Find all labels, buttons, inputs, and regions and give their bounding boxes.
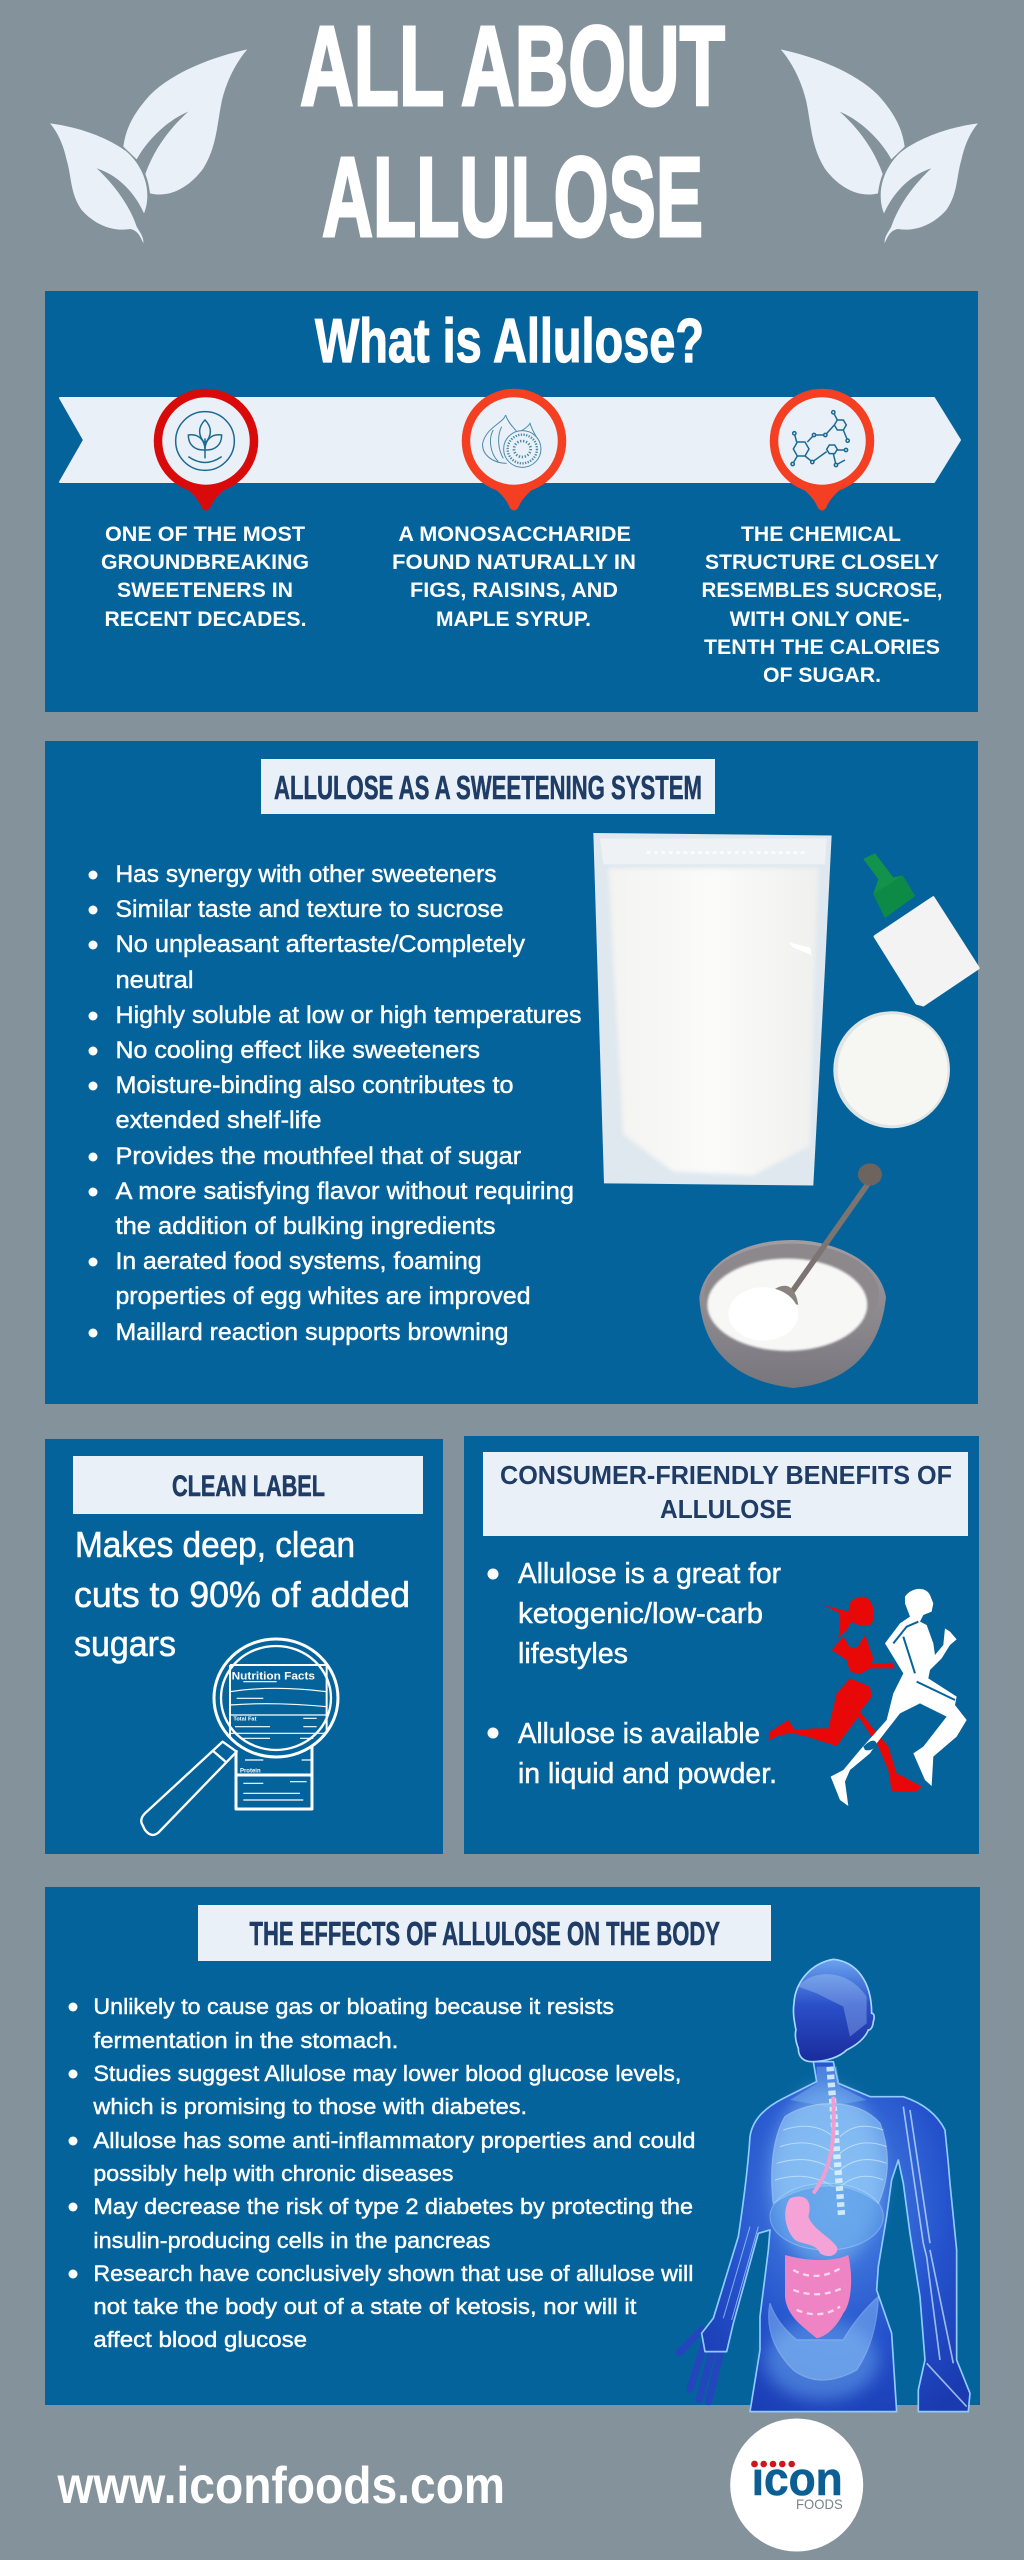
caption: groundbreaking: ONE OF THE MOST [105,523,305,546]
caption: chemical structure: WITH ONLY ONE- [730,608,910,631]
caption: chemical structure: STRUCTURE CLOSELY [705,551,939,574]
neck glow [790,2067,867,2107]
icon: magnifier over nutrition label [141,1639,338,1835]
caption: groundbreaking: GROUNDBREAKING [101,551,309,574]
heading: effects on the body: THE EFFECTS OF ALLULOSE ON THE BODY [250,1915,720,1952]
bullet list: sweetening properties: Provides the mouthfeel that of sugar [116,1143,521,1170]
bullet list: sweetening properties: Moisture-binding also contributes to [116,1072,514,1099]
skull highlight [798,1974,867,2037]
panel: consumer-friendly benefits [464,1436,979,1854]
spine [830,2067,842,2217]
bullet list: benefits: in liquid and powder. [518,1758,777,1790]
heading: consumer-friendly benefits [483,1452,968,1536]
head [793,1959,874,2062]
pin: fig icon [466,393,562,510]
ribs [775,2126,887,2187]
caption: monosaccharide: FOUND NATURALLY IN [392,551,636,574]
left hand fingers [679,2330,722,2402]
abdomen [770,2183,883,2250]
bullet list: sweetening properties: A more satisfying flavor without requiring [116,1178,574,1205]
bullet list: sweetening properties: Has synergy with other sweeteners [116,861,496,888]
image: dropper bottle [863,853,978,1005]
icon: magnifier over nutrition label: Protein [240,1769,261,1775]
bullet list: sweetening properties [88,861,582,1346]
pin: molecule icon [774,393,870,510]
bullet list: sweetening properties: No cooling effect like sweeteners [116,1037,480,1064]
rib cage [772,2104,887,2203]
body silhouette [702,2062,970,2412]
bullet list: effects: possibly help with chronic diseases [93,2161,453,2186]
bullet list: effects: Research have conclusively shown that use of allulose will [93,2261,693,2286]
bullet list: sweetening properties: extended shelf-life [116,1107,322,1134]
text: clean cuts: sugars [74,1623,176,1664]
bullet list: sweetening properties: No unpleasant aftertaste/Completely [116,931,525,958]
title: ALLULOSE [322,134,703,260]
bullet list: sweetening properties: Similar taste and texture to sucrose [116,896,503,923]
bullet list: effects: Studies suggest Allulose may lower blood glucose levels, [93,2061,681,2086]
bullet list: effects: Allulose has some anti-inflammatory properties and could [93,2128,695,2153]
caption: chemical structure: OF SUGAR. [763,664,881,687]
bullet list: sweetening properties: Highly soluble at low or high temperatures [116,1002,582,1029]
icon: leaves left [50,49,247,243]
heading: sweetening system: ALLULOSE AS A SWEETENING SYSTEM [274,769,702,806]
bullet list: effects: which is promising to those with diabetes. [92,2094,527,2119]
bullet list: benefits: Allulose is available [518,1718,760,1750]
caption: groundbreaking: SWEETENERS IN [117,579,293,602]
icon: runners [768,1589,967,1806]
icon: leaves right [781,49,978,243]
text: clean cuts: cuts to 90% of added [74,1574,410,1615]
right arm bones [903,2107,967,2407]
panel: clean label [45,1439,443,1854]
pin: plant icon [158,393,254,510]
bullet list: benefits: ketogenic/low-carb [518,1598,763,1630]
logo: icon foods [730,2418,863,2552]
bullet list: benefits: Allulose is a great for [518,1558,781,1590]
intestine highlights [793,2267,845,2314]
bullet list: sweetening properties: neutral [116,967,194,994]
text: clean cuts [74,1524,410,1664]
hip glow [765,2320,878,2400]
logo: icon foods: icon [752,2452,843,2505]
title: ALL ABOUT [300,3,725,129]
panel: effects on the body [45,1887,980,2405]
bullet list: sweetening properties: the addition of bulking ingredients [116,1213,496,1240]
stomach [785,2196,837,2256]
caption: chemical structure: RESEMBLES SUCROSE, [702,579,942,602]
bullet list: effects: affect blood glucose [93,2327,307,2352]
caption: chemical structure: THE CHEMICAL [741,523,901,546]
panel: sweetening system [45,741,978,1404]
caption: monosaccharide: A MONOSACCHARIDE [398,523,631,546]
heading: clean label: CLEAN LABEL [172,1470,325,1503]
bullet list: benefits: lifestyles [518,1638,628,1670]
heading: consumer-friendly benefits: CONSUMER-FRIENDLY BENEFITS OF [500,1460,952,1490]
caption: monosaccharide: FIGS, RAISINS, AND [410,579,618,602]
icon: magnifier over nutrition label: Nutrition Facts [232,1670,315,1682]
heading: consumer-friendly benefits: ALLULOSE [660,1494,792,1524]
caption: groundbreaking [101,523,309,631]
bullet list: effects [68,1994,695,2352]
heading: what is allulose: What is Allulose? [315,307,704,376]
bullet list: sweetening properties: In aerated food systems, foaming [116,1248,482,1275]
bullet list: effects: insulin-producing cells in the pancreas [93,2228,490,2253]
image: translucent human body [679,1959,970,2412]
intestines [785,2255,851,2338]
image: powder dish [833,1011,950,1128]
panel: what is allulose [45,291,978,712]
caption: monosaccharide [392,523,636,631]
caption: monosaccharide: MAPLE SYRUP. [436,608,591,631]
bullet list: effects: May decrease the risk of type 2 diabetes by protecting the [93,2194,693,2219]
bullet list: effects: fermentation in the stomach. [93,2028,398,2053]
icon: magnifier over nutrition label: Total Fat [233,1717,257,1723]
bullet list: sweetening properties: properties of egg whites are improved [116,1283,530,1310]
bullet list: benefits [488,1558,781,1790]
logo: icon foods: FOODS [796,2496,843,2512]
heading: sweetening system [261,759,715,814]
heading: effects on the body [198,1905,771,1961]
image: sweetener pouch [593,833,832,1186]
heading: clean label [73,1456,423,1514]
pelvis [769,2297,878,2380]
image: bowl with spoon [699,1163,886,1388]
ribbon arrow [60,398,960,482]
esophagus [813,2097,834,2193]
website url: www.iconfoods.com [57,2457,505,2515]
title [300,3,725,260]
text: clean cuts: Makes deep, clean [75,1524,355,1565]
bullet list: effects: not take the body out of a state of ketosis, nor will it [93,2294,636,2319]
left arm bones [723,2227,758,2320]
caption: groundbreaking: RECENT DECADES. [104,608,306,631]
caption: chemical structure: TENTH THE CALORIES [704,636,940,659]
bullet list: effects: Unlikely to cause gas or bloating because it resists [93,1994,614,2019]
caption: chemical structure [702,523,942,687]
torso glow [772,2087,882,2267]
bullet list: sweetening properties: Maillard reaction supports browning [116,1319,508,1346]
